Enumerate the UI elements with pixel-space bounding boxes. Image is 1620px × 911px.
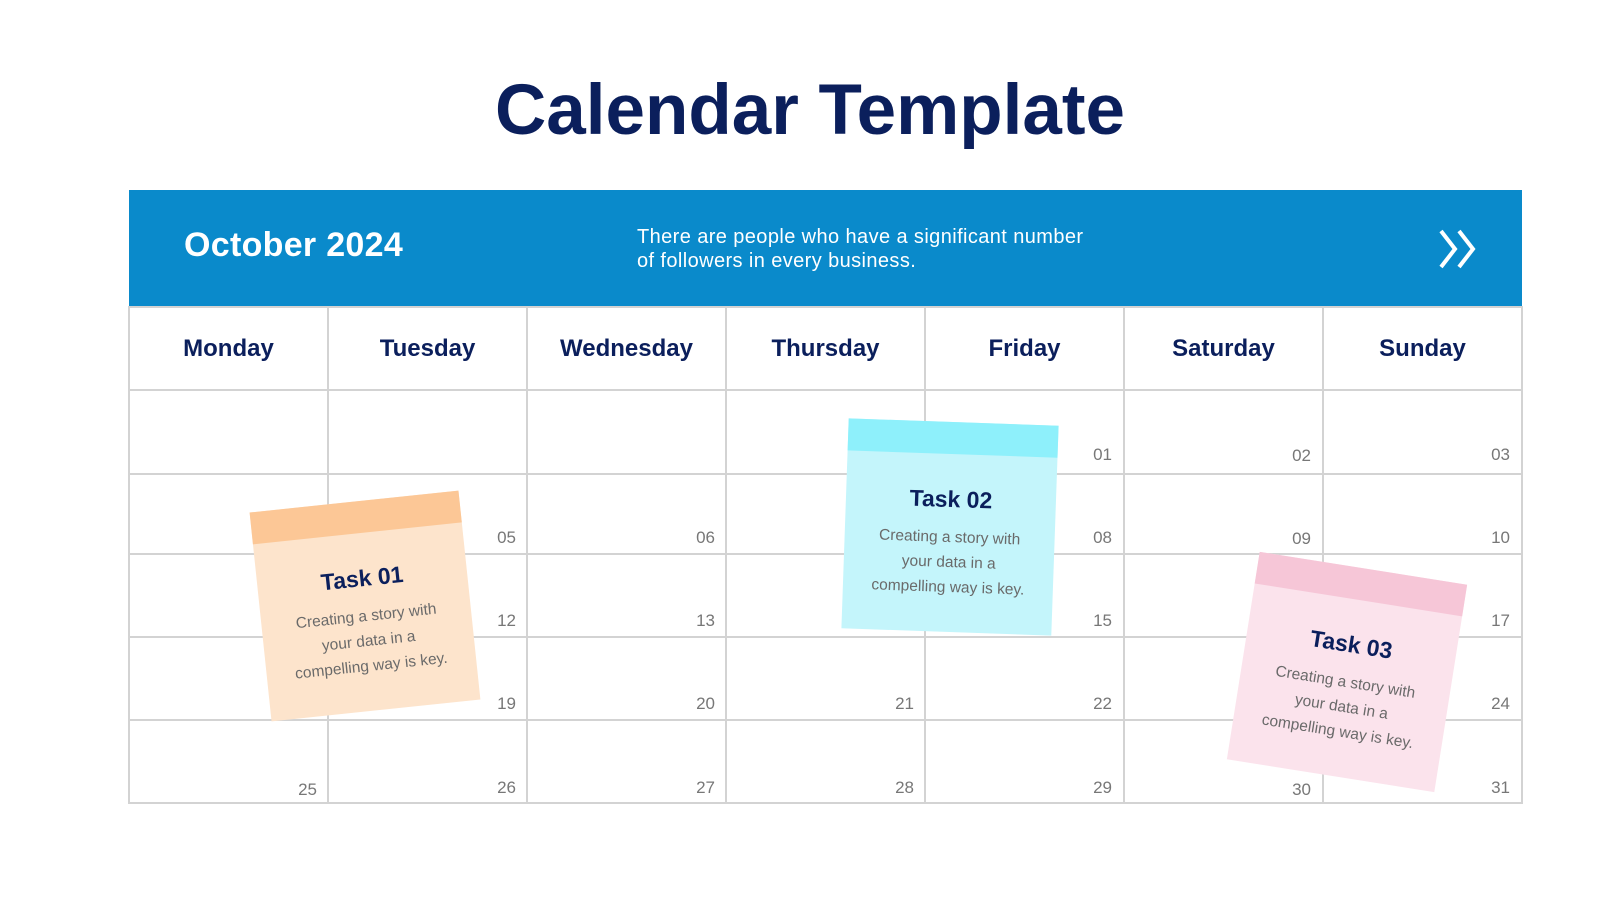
date numbers: 07 [895,528,914,547]
date numbers: 16 [1292,611,1311,630]
date numbers: 20 [696,694,715,713]
icon: double chevron [1440,230,1476,268]
month label: October 2024 [184,226,403,264]
date numbers: 10 [1491,528,1510,547]
date numbers: 13 [696,611,715,630]
date numbers: 06 [696,528,715,547]
weekday headers: Monday [183,334,274,362]
date numbers: 23 [1292,694,1311,713]
sticky note: task 03: Task 03 [1308,625,1394,664]
sticky note: task 01: Creating a story with [295,601,437,632]
title: Calendar Template [495,71,1125,150]
date numbers: 08 [1093,528,1112,547]
weekday headers: Thursday [771,334,880,362]
date numbers: 11 [299,611,317,630]
sticky note: task 01 [250,491,480,721]
date numbers: 28 [895,778,914,797]
date numbers: 30 [1292,780,1311,799]
header description [637,226,1083,272]
date numbers: 24 [1491,694,1510,713]
weekday headers: Sunday [1379,334,1466,362]
sticky note: task 01: your data in a [321,628,416,655]
sticky note: task 03: compelling way is key. [1261,711,1414,752]
weekday headers [183,334,1466,362]
date numbers: 18 [298,694,317,713]
date numbers: 01 [1093,445,1112,464]
date numbers: 02 [1292,446,1311,465]
sticky note: task 03: Creating a story with [1274,663,1416,702]
sticky note: task 01: compelling way is key. [294,650,448,683]
sticky note: task 02: Creating a story with [879,527,1021,548]
sticky note: task 02 [841,418,1059,636]
date numbers: 25 [298,780,317,799]
header description: There are people who have a significant number [637,226,1083,248]
weekday headers: Saturday [1172,334,1275,362]
date numbers: 15 [1093,611,1112,630]
sticky note: task 03 [1227,552,1467,792]
sticky note: task 01: Task 01 [320,561,405,595]
sticky note: task 02: compelling way is key. [871,576,1025,599]
date numbers: 17 [1491,611,1510,630]
date numbers: 14 [895,611,914,630]
date numbers: 22 [1093,694,1112,713]
sticky note: task 03: your data in a [1294,691,1389,723]
sticky note: task 02: Task 02 [909,485,993,513]
date numbers: 21 [895,694,914,713]
date numbers: 12 [497,611,516,630]
date numbers: 26 [497,778,516,797]
date numbers: 31 [1491,778,1510,797]
date numbers: 04 [298,528,317,547]
date numbers: 09 [1292,529,1311,548]
sticky note: task 02: your data in a [902,552,996,573]
weekday headers: Wednesday [560,334,693,362]
header band [129,190,1522,307]
date numbers: 03 [1491,445,1510,464]
date numbers: 29 [1093,778,1112,797]
weekday headers: Friday [988,334,1061,362]
date numbers: 27 [696,778,715,797]
date numbers: 05 [497,528,516,547]
date numbers: 19 [497,694,516,713]
weekday headers: Tuesday [380,334,475,362]
header description: of followers in every business. [637,250,916,272]
